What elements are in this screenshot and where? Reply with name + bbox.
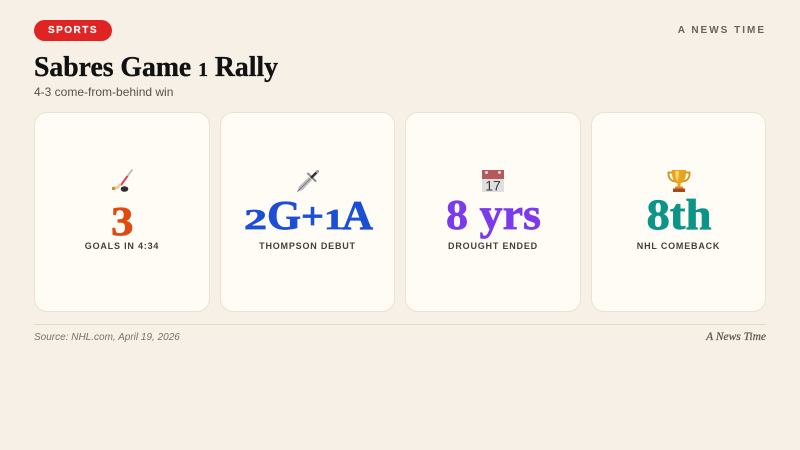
stat value: 3 <box>111 198 134 244</box>
panel: debut <box>220 112 395 312</box>
panel: comeback <box>591 112 766 312</box>
category badge: SPORTS <box>48 25 98 36</box>
brand signature: A News Time <box>706 331 766 343</box>
icon: dagger <box>297 170 319 192</box>
panel: goals <box>34 112 210 312</box>
stat value <box>244 192 374 238</box>
category badge <box>34 20 112 41</box>
stat value: + <box>301 196 324 238</box>
source note: Source: NHL.com, April 19, 2026 <box>34 332 180 343</box>
title: Sabres Game 1 Rally <box>34 52 278 83</box>
icon: calendar <box>482 170 504 193</box>
subtitle: 4-3 come-from-behind win <box>34 85 173 99</box>
stat label: THOMPSON DEBUT <box>259 241 356 251</box>
brand label: A NEWS TIME <box>678 25 766 36</box>
stat value: 2 <box>244 204 267 236</box>
stat label: NHL COMEBACK <box>637 241 720 251</box>
stat value: 8th <box>646 192 712 239</box>
stat label: DROUGHT ENDED <box>448 241 538 251</box>
stat value: G <box>267 192 301 238</box>
stat value: 1 <box>324 204 344 236</box>
stat value: A <box>342 192 373 238</box>
panel: drought <box>405 112 581 312</box>
stat label: GOALS IN 4:34 <box>85 241 159 251</box>
icon: hockey stick and puck <box>112 169 133 192</box>
stat value: 8 yrs <box>446 190 541 239</box>
icon: trophy <box>668 170 690 192</box>
